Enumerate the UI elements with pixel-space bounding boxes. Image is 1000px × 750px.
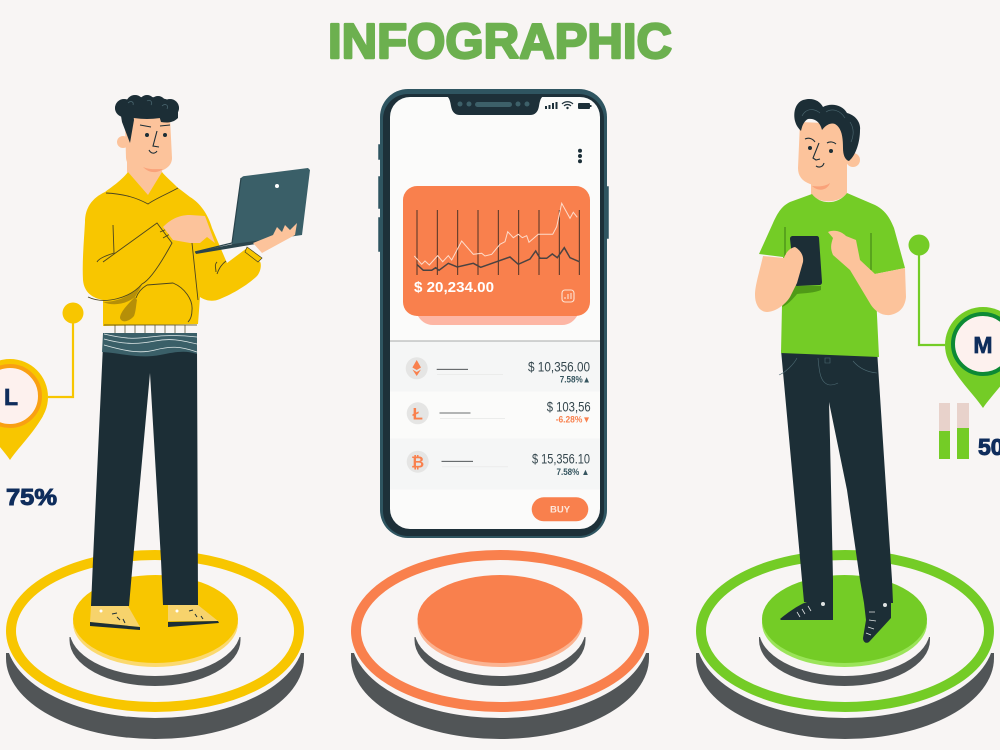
hair	[115, 95, 179, 143]
hair	[794, 99, 860, 161]
chart card	[403, 186, 590, 316]
sleeve shadow	[103, 285, 142, 304]
list divider	[390, 340, 600, 342]
cuff	[245, 247, 262, 262]
menu dots	[578, 149, 582, 163]
chart icon	[562, 290, 574, 302]
trouser seams	[779, 358, 877, 385]
platform: orange	[351, 555, 649, 739]
platform: green	[696, 555, 994, 739]
hem ribbing	[104, 325, 197, 333]
title: INFOGRAPHIC	[328, 15, 672, 69]
row: bitcoin: 7.58% ▲	[556, 467, 590, 477]
screen	[390, 97, 600, 529]
person: yellow hoodie with laptop	[83, 95, 310, 630]
progress bars	[939, 403, 969, 459]
pocket shadow	[120, 297, 137, 321]
line chart	[414, 203, 579, 275]
phone shadow	[782, 286, 821, 307]
row: litecoin: Ł	[413, 404, 423, 424]
shirt folds	[785, 227, 871, 270]
holding hand	[253, 223, 297, 253]
face	[798, 122, 860, 190]
row: bitcoin	[390, 438, 600, 490]
row: bitcoin: ₿	[411, 454, 424, 472]
handheld phone	[790, 236, 822, 286]
pin: M: M	[973, 332, 993, 358]
card shadow	[417, 314, 578, 325]
row: ethereum	[390, 342, 600, 392]
row: bitcoin: $ 15,356.10	[532, 451, 590, 466]
pin: L: L	[4, 384, 18, 410]
pointing hand	[163, 215, 215, 243]
row: litecoin	[407, 400, 591, 424]
smartphone	[379, 89, 608, 538]
notch	[446, 96, 544, 115]
neck	[811, 165, 847, 201]
connector: M	[919, 245, 945, 345]
trousers	[91, 345, 198, 606]
buy button: BUY	[550, 504, 571, 516]
connector: L	[48, 313, 73, 397]
pin: M	[945, 307, 1000, 408]
buy button	[532, 497, 588, 521]
hoodie details	[88, 188, 226, 322]
left arm	[755, 247, 803, 312]
dot: M	[908, 234, 930, 256]
laptop	[195, 168, 310, 254]
status icons	[545, 102, 592, 109]
right arm	[828, 231, 906, 315]
trousers	[781, 350, 893, 603]
row: litecoin: $ 103,56	[547, 400, 591, 415]
hoodie	[83, 172, 261, 326]
shoes	[90, 605, 219, 630]
row: ethereum: $ 10,356.00	[528, 360, 590, 375]
side buttons	[379, 145, 608, 251]
shirt hem	[102, 333, 197, 356]
phone body	[380, 89, 607, 538]
pin: L	[0, 359, 48, 460]
t-shirt	[759, 193, 905, 357]
platform: yellow	[6, 555, 304, 739]
shoes	[780, 600, 891, 643]
card balance: $ 20,234.00	[414, 279, 494, 296]
neck and face	[117, 114, 172, 197]
person: green t-shirt with phone	[755, 99, 906, 643]
row: litecoin: -6.28%▼	[556, 414, 591, 424]
row: ethereum: 7.58%▲	[560, 375, 591, 385]
value: 75%: 75%	[6, 484, 57, 510]
dot: L	[62, 302, 84, 324]
